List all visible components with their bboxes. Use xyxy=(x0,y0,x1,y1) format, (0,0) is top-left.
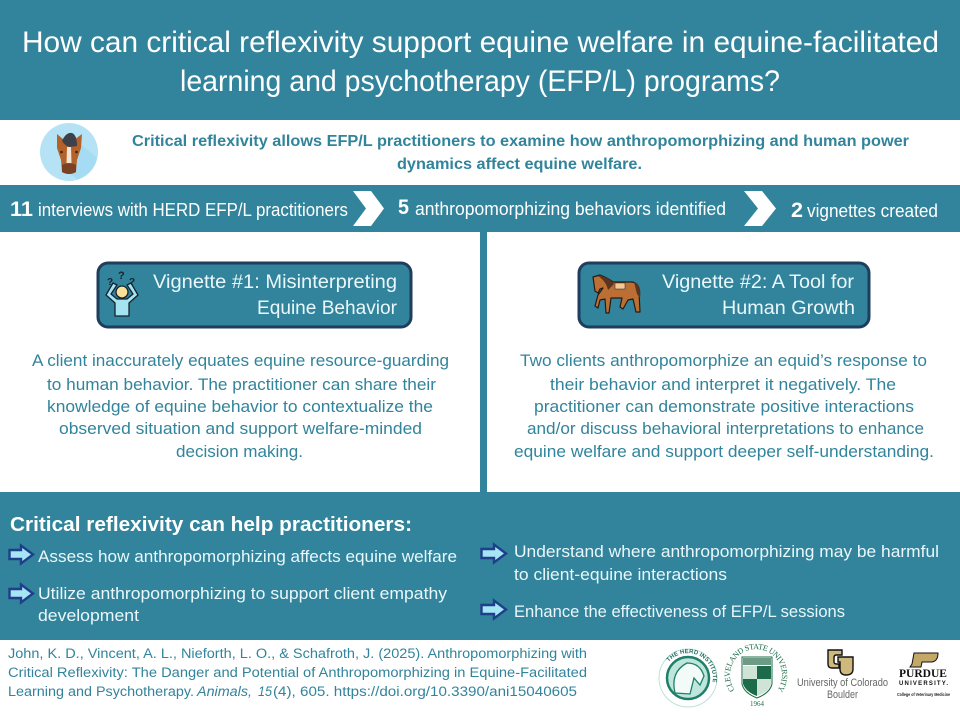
item: understand: Understand where anthropomorphizing may be harmful xyxy=(514,542,939,561)
panel: vignette 2 heading: Human Growth xyxy=(722,298,855,319)
logo: Cleveland State University: 1964 xyxy=(750,700,764,708)
citation xyxy=(8,646,587,699)
icon: confused person: ? xyxy=(129,277,135,288)
text block: vignette 2 description xyxy=(514,351,934,461)
step: 5 behaviors: anthropomorphizing behaviors identified xyxy=(415,199,726,219)
text block: vignette 2 description: practitioner can demonstrate positive interactions xyxy=(534,397,914,416)
text block: vignette 2 description: Two clients anthropomorphize an equid’s response to xyxy=(520,351,927,370)
item: assess: Assess how anthropomorphizing affects equine welfare xyxy=(38,547,457,566)
panel: vignette 1 heading xyxy=(98,263,411,327)
text block: vignette 1 description: knowledge of equine behavior to contextualize the xyxy=(47,397,433,416)
header: title: How can critical reflexivity support equine welfare in equine-facilitated xyxy=(22,26,939,59)
citation: (4), 605. https://doi.org/10.3390/ani15040605 xyxy=(273,684,577,699)
text block: vignette 1 description: to human behavior. The practitioner can share their xyxy=(47,375,436,394)
logo: Purdue University: UNIVERSITY. xyxy=(899,681,948,687)
logo: Purdue University: PURDUE xyxy=(899,668,947,680)
item: utilize: development xyxy=(38,606,139,625)
logo: University of Colorado Boulder: Boulder xyxy=(827,689,858,701)
arrow: chevron 1 xyxy=(353,191,384,226)
key message: dynamics affect equine welfare. xyxy=(397,156,642,173)
text block: vignette 2 description: and/or discuss behavioral interpretations to enhance xyxy=(527,419,924,438)
item: understand xyxy=(482,542,939,584)
icon: confused person: ? xyxy=(118,270,125,282)
logo: Cleveland State University: CLEVELAND STATE UNIVERSITY xyxy=(724,644,788,693)
process strip xyxy=(0,185,960,232)
item: utilize xyxy=(10,584,448,625)
logo: The HERD Institute: THE HERD INSTITUTE xyxy=(666,649,718,682)
icon: horse head in circle xyxy=(40,123,98,181)
citation: Critical Reflexivity: The Danger and Potential of Anthropomorphizing in Equine-Facilitated xyxy=(8,665,587,680)
citation: 15 xyxy=(258,684,272,699)
text block: vignette 1 description: A client inaccurately equates equine resource-guarding xyxy=(32,351,449,370)
citation: John, K. D., Vincent, A. L., Nieforth, L. O., & Schafroth, J. (2025). Anthropomorphizing with xyxy=(8,646,587,661)
icon: saddled horse xyxy=(593,275,640,313)
heading: Critical reflexivity can help practitioners: xyxy=(10,514,412,536)
text block: vignette 1 description xyxy=(32,351,449,461)
text block: vignette 2 description: equine welfare and support deeper self-understanding. xyxy=(514,442,934,461)
icon: confused person xyxy=(106,270,138,316)
item: utilize: Utilize anthropomorphizing to support client empathy xyxy=(38,584,448,603)
logo: University of Colorado Boulder xyxy=(797,650,888,701)
header: title xyxy=(0,0,960,120)
step: 11 interviews: 11 xyxy=(10,198,33,221)
divider between vignettes xyxy=(480,232,487,492)
key message: Critical reflexivity allows EFP/L practitioners to examine how anthropomorphizing and human power xyxy=(132,133,909,150)
logo: Purdue University xyxy=(897,653,950,697)
panel: vignette 2 heading: Vignette #2: A Tool for xyxy=(662,272,855,293)
item: understand: to client-equine interactions xyxy=(514,565,727,584)
text block: vignette 2 description: their behavior and interpret it negatively. The xyxy=(550,375,896,394)
citation: Learning and Psychotherapy. xyxy=(8,684,194,699)
panel: vignette 1 heading: Vignette #1: Misinterpreting xyxy=(153,272,397,293)
text block: vignette 1 description: observed situation and support welfare-minded xyxy=(59,419,422,438)
citation: Animals, xyxy=(196,684,252,699)
panel: vignette 1 heading: Equine Behavior xyxy=(257,298,398,319)
text block: vignette 1 description: decision making. xyxy=(176,442,303,461)
key message xyxy=(132,133,909,173)
step: 2 vignettes: 2 xyxy=(791,199,803,222)
step: 2 vignettes: vignettes created xyxy=(807,201,938,221)
header: title: learning and psychotherapy (EFP/L) programs? xyxy=(180,65,780,98)
item: enhance: Enhance the effectiveness of EFP/L sessions xyxy=(514,602,845,621)
panel: vignette 2 heading xyxy=(579,263,869,327)
step: 11 interviews: interviews with HERD EFP/L practitioners xyxy=(38,200,348,220)
logo: University of Colorado Boulder: University of Colorado xyxy=(797,677,888,689)
panel: how critical reflexivity helps xyxy=(0,492,960,640)
step: 5 behaviors: 5 xyxy=(398,196,409,219)
logo: The HERD Institute xyxy=(658,648,718,708)
icon: confused person: ? xyxy=(107,277,113,288)
arrow: chevron 2 xyxy=(744,191,776,226)
